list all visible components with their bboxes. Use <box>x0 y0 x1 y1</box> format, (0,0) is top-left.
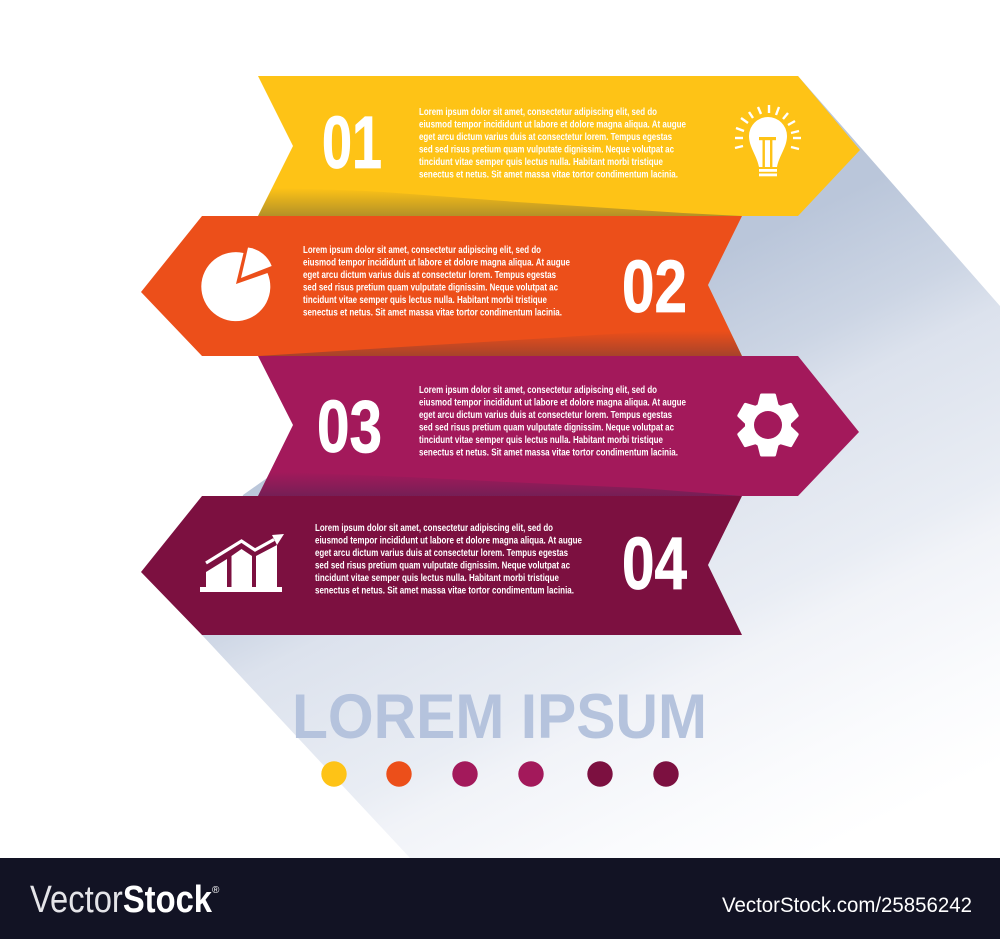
body text 1: eget arcu dictum varius duis at consectetur lorem. Tempus egestas <box>419 132 672 143</box>
panel 4: plum arrow <box>141 496 742 635</box>
body text 2: Lorem ipsum dolor sit amet, consectetur adipiscing elit, sed do <box>303 245 541 256</box>
body text 1: eiusmod tempor incididunt ut labore et dolore magna aliqua. At augue <box>419 120 686 130</box>
body text 1: senectus et netus. Sit amet massa vitae tortor condimentum lacinia. <box>419 170 678 180</box>
fold shading 3 <box>258 472 742 496</box>
icon: gear <box>737 395 799 455</box>
body text 3: eiusmod tempor incididunt ut labore et dolore magna aliqua. At augue <box>419 398 686 408</box>
image id: VectorStock.com/25856242 <box>722 894 972 917</box>
panel 3: magenta arrow <box>258 356 859 496</box>
body text 4: sed sed risus pretium quam vulputate dignissim. Neque volutpat ac <box>315 560 570 572</box>
registered mark: ® <box>212 885 220 896</box>
arrow shape 1 <box>258 76 860 216</box>
body text 1: tincidunt vitae semper quis lectus nulla. Habitant morbi tristique <box>419 157 663 168</box>
body text 4: senectus et netus. Sit amet massa vitae tortor condimentum lacinia. <box>315 586 574 596</box>
arrow shape 2 <box>141 216 742 356</box>
title: LOREM IPSUM <box>292 682 707 752</box>
body text 2: sed sed risus pretium quam vulputate dignissim. Neque volutpat ac <box>303 282 558 294</box>
body text 2: eiusmod tempor incididunt ut labore et dolore magna aliqua. At augue <box>303 258 570 268</box>
arrow shape 3 <box>258 356 859 496</box>
number 04: 04 <box>622 522 687 605</box>
body text 4 <box>315 523 582 596</box>
body text 3: tincidunt vitae semper quis lectus nulla. Habitant morbi tristique <box>419 435 663 446</box>
body text 2: eget arcu dictum varius duis at consectetur lorem. Tempus egestas <box>303 270 556 281</box>
body text 3 <box>419 385 686 458</box>
icon: light bulb <box>735 105 801 176</box>
body text 2: senectus et netus. Sit amet massa vitae tortor condimentum lacinia. <box>303 308 562 318</box>
body text 1 <box>419 107 686 180</box>
body text 1: Lorem ipsum dolor sit amet, consectetur adipiscing elit, sed do <box>419 107 657 118</box>
pie chart icon <box>201 248 272 321</box>
footer bar <box>0 858 1000 939</box>
body text 4: eiusmod tempor incididunt ut labore et dolore magna aliqua. At augue <box>315 536 582 546</box>
number 03: 03 <box>317 385 382 468</box>
number 01: 01 <box>322 101 382 184</box>
colour dots <box>321 761 679 787</box>
fold shading 1 <box>258 188 742 216</box>
fold shading 2 <box>258 331 742 356</box>
body text 2: tincidunt vitae semper quis lectus nulla. Habitant morbi tristique <box>303 295 547 306</box>
body text 4: eget arcu dictum varius duis at consectetur lorem. Tempus egestas <box>315 548 568 559</box>
long shadow <box>202 76 1000 858</box>
panel 2: orange arrow <box>141 216 742 356</box>
body text 3: sed sed risus pretium quam vulputate dignissim. Neque volutpat ac <box>419 422 674 434</box>
body text 1: sed sed risus pretium quam vulputate dignissim. Neque volutpat ac <box>419 144 674 156</box>
arrow shape 4 <box>141 496 742 635</box>
panel 1: yellow arrow <box>258 76 860 216</box>
number 02: 02 <box>622 245 687 328</box>
body text 3: senectus et netus. Sit amet massa vitae tortor condimentum lacinia. <box>419 448 678 458</box>
body text 2 <box>303 245 570 318</box>
body text 3: eget arcu dictum varius duis at consectetur lorem. Tempus egestas <box>419 410 672 421</box>
body text 4: tincidunt vitae semper quis lectus nulla. Habitant morbi tristique <box>315 573 559 584</box>
growth chart icon <box>200 534 284 592</box>
body text 3: Lorem ipsum dolor sit amet, consectetur adipiscing elit, sed do <box>419 385 657 396</box>
VectorStock logo: VectorStock <box>30 879 213 921</box>
body text 4: Lorem ipsum dolor sit amet, consectetur adipiscing elit, sed do <box>315 523 553 534</box>
